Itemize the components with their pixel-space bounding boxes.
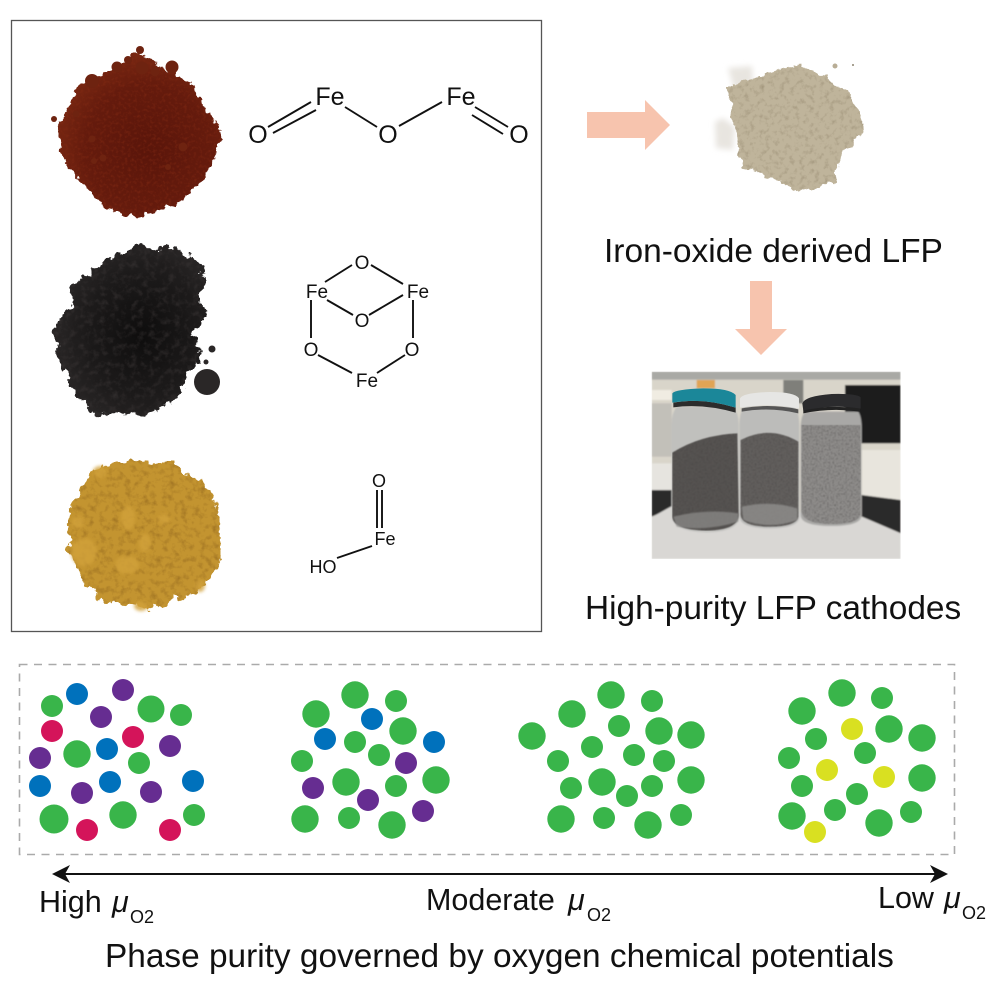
molecule: Fe3O4: Fe xyxy=(407,282,429,303)
molecule: Fe2O3: Fe xyxy=(446,83,476,111)
icon: black iron oxide powder xyxy=(53,247,220,415)
label: low oxygen potential: O2 xyxy=(962,903,986,923)
particle cluster: high oxygen potential xyxy=(29,679,205,841)
molecule: Fe2O3 xyxy=(248,83,529,149)
particle cluster: moderate oxygen potential, pure phase xyxy=(518,681,705,839)
icon: red iron oxide powder xyxy=(51,46,222,217)
molecule: FeOOH: O xyxy=(372,471,386,491)
molecule: FeOOH xyxy=(310,471,396,577)
label: low oxygen potential: Low xyxy=(878,881,935,915)
label: low oxygen potential: μ xyxy=(943,881,961,915)
caption: phase purity: Phase purity governed by oxygen chemical potentials xyxy=(105,938,894,975)
molecule: Fe2O3: Fe xyxy=(315,83,345,111)
molecule: FeOOH: HO xyxy=(310,557,336,577)
photo: three jars of LFP cathode powder xyxy=(652,372,901,559)
molecule: Fe2O3: O xyxy=(509,121,529,149)
arrow: right xyxy=(587,100,670,150)
particle cluster: low oxygen potential xyxy=(778,679,936,843)
panel: iron oxide precursors xyxy=(12,20,542,632)
panel: dashed phase purity box xyxy=(20,664,954,854)
heading: iron-oxide derived LFP: Iron-oxide derived LFP xyxy=(604,233,943,270)
molecule: Fe3O4: O xyxy=(355,253,369,274)
label: high oxygen potential: μ xyxy=(111,885,129,919)
particle cluster: moderately high oxygen potential xyxy=(291,681,450,839)
label: moderate oxygen potential: Moderate xyxy=(426,883,555,917)
label: moderate oxygen potential: O2 xyxy=(587,905,611,925)
icon: yellow iron oxyhydroxide powder xyxy=(67,460,220,611)
molecule: Fe3O4: O xyxy=(304,340,318,361)
molecule: Fe3O4: Fe xyxy=(306,282,328,303)
molecule: Fe3O4 xyxy=(304,253,429,392)
icon: tan LFP powder xyxy=(715,63,863,192)
molecule: Fe2O3: O xyxy=(378,121,398,149)
heading: high-purity LFP cathodes: High-purity LFP cathodes xyxy=(585,590,961,627)
molecule: FeOOH: Fe xyxy=(374,529,396,549)
arrow: down xyxy=(735,281,787,355)
molecule: Fe2O3: O xyxy=(248,121,268,149)
arrow: oxygen potential axis xyxy=(52,865,948,883)
label: moderate oxygen potential: μ xyxy=(567,883,585,917)
label: high oxygen potential: High xyxy=(39,885,102,919)
molecule: Fe3O4: O xyxy=(355,311,369,332)
label: high oxygen potential: O2 xyxy=(130,907,154,927)
molecule: Fe3O4: O xyxy=(405,340,419,361)
molecule: Fe3O4: Fe xyxy=(356,371,378,392)
